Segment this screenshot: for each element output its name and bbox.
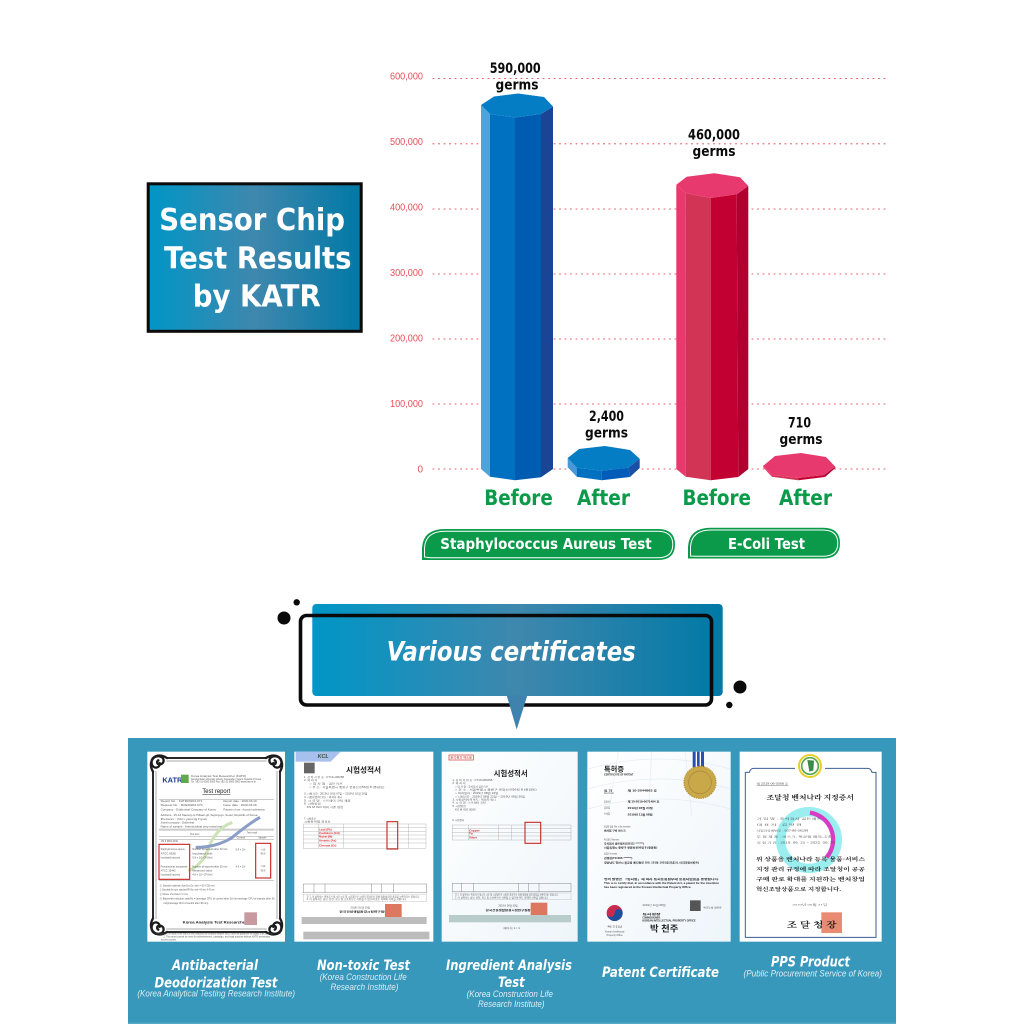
pill: Staphylococcus Aureus Test xyxy=(422,529,675,560)
certificate: KATR test report: Measured value xyxy=(192,869,213,872)
certificate: KATR test report: Test item xyxy=(190,833,199,836)
certificate: non-toxic test report: 한국건설생활환경시험연구원장 xyxy=(339,910,389,914)
certificate: KATR test report: Staphylococcus aureus xyxy=(161,848,185,851)
caption: ingredient analysis test: Test xyxy=(498,975,526,991)
caption: non-toxic test: Non-toxic Test xyxy=(317,958,411,974)
certificate: ingredient analysis test report: 2. 의 뢰 자 xyxy=(452,781,467,785)
certificate: patent: has been registered at the Korean Intellectual Property Office. xyxy=(604,886,692,889)
bar: E-Coli before xyxy=(676,173,748,480)
title box: Sensor Chip Test Results by KATR xyxy=(148,184,361,331)
y axis labels and grid lines: 600,000 xyxy=(390,72,423,82)
certificate: PPS product: 구매 판로 확대를 지원하는 벤처창업 xyxy=(756,876,865,883)
certificate: ingredient analysis test report: ○ 회 사 명 : 주식회사 골든리프 xyxy=(455,784,489,788)
certificate: non-toxic test report: 5. 시 료 명 : 스프레이 코팅 제품 xyxy=(304,798,352,802)
certificate: patent: This is to certify that, in accordance with the Patent Act, a patent for the invention xyxy=(604,882,720,885)
certificate: ingredient analysis test report: 시험성적서 xyxy=(494,768,528,778)
certificate: KATR test report: Company : Goldenleaf Company of Korea xyxy=(161,808,217,811)
certificate: KATR test report: Issue date : 2020.03.26 xyxy=(223,804,258,807)
value: 2,400 germs xyxy=(585,409,628,442)
caption: patent certificate: Patent Certificate xyxy=(602,965,719,981)
certificate: ingredient analysis test report: ○ 의뢰일자 : 2019년 08월 22일 xyxy=(455,791,498,795)
value: 590,000 germs: germs xyxy=(496,78,538,94)
certificate: PPS product: 대 표 자 : 김 영 현 xyxy=(757,822,802,826)
certificate: patent: 김영현(741005-*******) xyxy=(604,856,633,860)
certificate: KATR test report: KATR xyxy=(162,775,183,784)
certificate: patent: Property Office xyxy=(607,934,623,937)
caption: antibacterial deodorization test: Antibacterial xyxy=(171,958,258,974)
value: 710 germs xyxy=(780,416,822,448)
caption: antibacterial deodorization test xyxy=(137,958,295,1000)
certificate: non-toxic test report: KS M ISO 의뢰 기준 방법 xyxy=(307,805,343,809)
certificate: KATR test report: 4.6 × 10⁵ xyxy=(236,864,246,868)
certificate: patent xyxy=(587,752,731,942)
certificate: patent: COMMISSIONER, xyxy=(642,918,661,920)
certificate: KATR test report: Incubated bacteria xyxy=(161,856,181,859)
certificate: non-toxic test report: 2. 의 뢰 자 xyxy=(304,778,318,782)
certificate: KATR test report: Incubated bacteria xyxy=(161,874,181,877)
certificate: KATR test report: Test result xyxy=(247,832,258,835)
certificate: KATR test report: Pseudomonas aeruginosa xyxy=(161,865,188,868)
caption: non-toxic test: Research Institute) xyxy=(330,982,398,993)
certificate: patent: Patent Number xyxy=(604,792,614,795)
certificate: KATR test report: ② Standard film type: standard PE film, size = 40 mm X 40 mm xyxy=(160,888,215,892)
certificate: PPS product: 2019년 06월 21일 xyxy=(792,903,829,907)
category labels: before and after: Before xyxy=(484,486,553,510)
certificate: ingredient analysis test report: 2019년 08월 30일 xyxy=(498,904,518,908)
certificate: patent: 발명자 Inventor xyxy=(604,852,618,856)
certificate: non-toxic test report: Chrome (Cr) xyxy=(319,843,336,847)
certificate: KATR test report: Address : 25-16 Saeung-ro Hillaeri-gil, Sejong-gu, Seoul, Republic of Korea xyxy=(161,814,258,817)
certificate: patent: 경상남도 양산시 물금읍 메디컬로 100, 101동 1001호(가촌리, 이지더원아파트) xyxy=(604,861,699,865)
certificate: non-toxic test report xyxy=(294,752,433,942)
certificate: KATR test report: Person : Kim young hyun xyxy=(161,818,209,821)
certificate: patent: 제 10-2044863 호 xyxy=(628,788,658,792)
title box: Sensor Chip Test Results by KATR: Test Results xyxy=(164,241,352,276)
bar: Staphylococcus after xyxy=(568,446,640,480)
certificate: non-toxic test report: ○ 회 사 명 : 골든리프 xyxy=(309,781,344,785)
certificate: patent: 박 천주 xyxy=(650,923,679,933)
certificate: patent: 특허권자 Patentee xyxy=(604,838,620,842)
y axis labels and grid lines xyxy=(390,72,887,476)
certificate: KATR test report: Report No. : KATR00203-071 xyxy=(161,800,203,803)
value: 2,400 germs: germs xyxy=(585,426,628,442)
caption: PPS product: (Public Procurement Service of Korea) xyxy=(744,969,882,980)
title box: Sensor Chip Test Results by KATR: by KATR xyxy=(193,280,321,315)
certificate: PPS product: 지 정 기 간 : 2019. 06. 21 ~ 2022. 06. 20 xyxy=(757,840,836,844)
certificate: patent: 2019년 06월 24일 xyxy=(628,806,653,810)
certificate: non-toxic test report: 주 1. 이 성적서는 의뢰자가 제시한 시료 및 시료명으로 시험한 결과로서 전체 제품에 대한 품질을 보증하지는 않습니다. xyxy=(307,894,420,898)
certificate: patent: KOREAN INTELLECTUAL PROPERTY OFFICE xyxy=(642,920,696,923)
certificate: KATR test report: Korea Analysis Test Researcher (KATR) xyxy=(191,775,246,778)
certificate: KATR test report: Request No. : RAN00203-070 xyxy=(161,804,203,807)
caption: ingredient analysis test: (Korea Construction Life xyxy=(467,989,553,1000)
certificate: patent: Korean Intellectual xyxy=(605,931,625,934)
certificate: PPS product: 기 업 명 : 주식회사 골든레프 xyxy=(757,816,824,820)
certificate: KATR test report: Sample xyxy=(258,838,267,840)
banner: Various certificates: Various certificates xyxy=(387,637,636,668)
certificate: KATR test report: ATCC 15442 xyxy=(161,869,176,872)
certificate: non-toxic test report: 7. 시험결과 xyxy=(304,816,317,820)
certificate: KATR test report: incubated with xyxy=(192,852,213,855)
y axis labels and grid lines: 100,000 xyxy=(390,399,423,410)
y axis labels and grid lines: 500,000 xyxy=(390,137,423,148)
pill: E-Coli Test xyxy=(688,528,840,558)
value: 460,000 germs: 460,000 xyxy=(688,128,740,144)
certificate: PPS product: 지정 관리 규정에 따라 조달청이 공공 xyxy=(756,866,865,873)
certificate: PPS product: 제 2019-06-0068 호 xyxy=(757,782,790,786)
certificate: KATR test report: Purpose of use : Account submission xyxy=(223,808,266,811)
bar: E-Coli after xyxy=(763,453,835,480)
certificate: KATR test report: Number of bacteria after 30 min xyxy=(192,848,228,851)
certificate: patent: 주식회사 골든레프(180111-*******) xyxy=(604,842,644,846)
certificate: KATR test report: 5.9 × 10⁵ xyxy=(236,847,246,851)
certificate: KATR test report: Submit company : Goldenleaf xyxy=(161,822,194,825)
certificate: non-toxic test report: KCL xyxy=(318,754,329,760)
certificate: patent: 서울특별시 중랑구 봉화산로56길 8 (중화동) xyxy=(604,846,658,850)
certificate: ingredient analysis test report: 1. 성 적 서 번 호 : CT19-084258 xyxy=(452,778,493,782)
caption: ingredient analysis test xyxy=(446,958,572,1010)
certificate: PPS product: 혁신조달상품으로 지정합니다. xyxy=(756,886,842,893)
certificate: non-toxic test report: 시험성적서 xyxy=(346,764,381,774)
certificate: KATR test report: 4.6 × 10⁵ CFU/ml xyxy=(192,873,213,877)
certificate: ingredient analysis test report: 한국건설생활환경시험연구원장 xyxy=(486,908,532,912)
certificate: non-toxic test report: ○ 주 소 : 서울특별시 중랑구 봉화산로56길 8 (중화동) xyxy=(309,785,385,789)
certificate: non-toxic test report: 시험항목별 결과표 xyxy=(304,819,332,823)
caption: ingredient analysis test: Ingredient Analysis xyxy=(446,958,572,974)
certificate: non-toxic test report: 6. 시험방법 xyxy=(304,802,321,806)
y axis labels and grid lines: 0 xyxy=(418,464,424,476)
category labels: before and after: After xyxy=(779,486,833,510)
certificate: patent: 특허증 xyxy=(604,765,625,774)
certificate: ingredient analysis test report: 6. 시험결과 xyxy=(452,818,465,822)
value: 590,000 germs: 590,000 xyxy=(490,61,541,77)
value: 2,400 germs: 2,400 xyxy=(589,409,624,425)
caption: ingredient analysis test: Research Institute) xyxy=(478,999,544,1010)
certificate: patent: 센서칩 구비 마스크 xyxy=(604,828,627,832)
caption: antibacterial deodorization test: Deodorization Test xyxy=(154,975,279,991)
certificate: patent: 위의 발명은 「특허법」에 따라 특허등록원부에 등록되었음을 증명합니다. xyxy=(604,877,720,881)
certificate: KATR test report: 99.9 xyxy=(261,854,266,856)
caption: non-toxic test xyxy=(317,958,411,993)
certificate: patent: CERTIFICATE OF PATENT xyxy=(604,774,634,777)
certificate: KATR test report: ④ Bacterial reduction rate(%) = (average CFU of control after 30 min-average CFU of sample after 30 xyxy=(160,896,275,900)
value: 460,000 germs xyxy=(688,128,740,160)
certificate: ingredient analysis test report xyxy=(442,752,578,942)
certificate: PPS product: 조 달 청 장 xyxy=(787,919,837,929)
certificate: non-toxic test report: 4. 시험방법/적 용도 : 의뢰자 제시 xyxy=(304,795,342,799)
certificate: KATR test report: Name of sample : Antimicrobial chip metal paint xyxy=(161,826,224,829)
certificate: KATR test report: any other purposes xyxy=(161,938,177,941)
certificate: ingredient analysis test report: 3. 시험성적서의 용도 : 의뢰자 제시 xyxy=(452,798,496,802)
pill: Staphylococcus Aureus Test: Staphylococcus Aureus Test xyxy=(440,535,652,553)
certificate: ingredient analysis test report: ○ 주 소 : 서울특별시 중랑구 봉화산로56길 8 (중화동) xyxy=(455,788,537,792)
certificate: patent: 특허청장 xyxy=(642,912,662,916)
certificate: patent: 2019년 11월 08일 xyxy=(642,903,666,907)
bar: Staphylococcus before xyxy=(481,94,553,480)
certificate: PPS product xyxy=(740,752,882,942)
certificate: KATR test report: Control xyxy=(237,837,246,840)
title box: Sensor Chip Test Results by KATR: Sensor Chip xyxy=(159,203,345,238)
category labels: before and after: After xyxy=(577,486,631,510)
certificate: PPS product: 사업자등록번호 : 607-86-36199 xyxy=(757,828,809,832)
certificate: patent: 제 10-2019-0071484 호 xyxy=(628,800,660,804)
certificate: ingredient analysis test report: Tin xyxy=(469,832,473,836)
certificate: patent: 특 허 xyxy=(604,788,612,792)
certificate: ingredient analysis test report: Copper xyxy=(469,828,481,832)
certificate: patent: 특허청 xyxy=(607,924,622,928)
certificate: ingredient analysis test report: 5. 시험방법 xyxy=(452,804,466,808)
certificate: KATR test report: Test report xyxy=(202,788,231,795)
certificate: non-toxic test report: 2019년 10월 29일 xyxy=(351,905,370,909)
caption: PPS product: PPS Product xyxy=(771,955,851,971)
certificate: ingredient analysis test report: ○ 시험기간 : 2019년 08월 22일 ~ 2019년 08월 30일 xyxy=(455,794,525,798)
certificate: KATR test report: 5.9 × 10⁵ CFU/ml xyxy=(192,855,213,859)
certificate: patent: 2019년 11월 08일 xyxy=(628,812,653,816)
certificate: KATR test report: <10 xyxy=(261,848,266,851)
certificate: KATR test report: Tel. +82-31-0000-0000 Fax +82-31-0000-0000 www.katr.re.kr xyxy=(191,781,256,784)
value: 710 germs: germs xyxy=(780,432,822,448)
certificate: patent: 출원번호 xyxy=(604,799,611,803)
value: 590,000 germs xyxy=(490,61,541,94)
certificate: ingredient analysis test report: 4. 시 료 명 : 스프레이 코팅 xyxy=(452,801,486,805)
category labels: before and after xyxy=(484,486,833,510)
certificate: KATR test report: Number of bacteria after 30 min xyxy=(192,865,228,868)
y axis labels and grid lines: 300,000 xyxy=(390,268,423,279)
certificate: non-toxic test report: Lead (Pb) xyxy=(319,827,332,831)
certificate: KATR test report: ③ Volume of inoculum: 0.4 mL xyxy=(160,892,189,896)
certificate: PPS product: 위 상품을 벤처나라 등록 물품·서비스 xyxy=(756,856,865,863)
certificate: non-toxic test report: 2. 이 성적서는 홍보, 선전, 광고 및 소송용으로 사용될 수 없으며 용도 이외의 사용을 금합니다. xyxy=(307,897,407,901)
certificate: KATR test report xyxy=(147,752,285,942)
caption: non-toxic test: (Korea Construction Life xyxy=(320,972,407,983)
certificate: ingredient analysis test report: 주 1. 이 성적서는 의뢰자가 제시한 시료 및 시료명으로 시험한 결과로서 전체 제품에 대한 품질을 보증하지는 않습니다. xyxy=(455,893,559,897)
pill: E-Coli Test: E-Coli Test xyxy=(728,535,805,553)
certificate: non-toxic test report: 1. 성 적 서 번 호 : CT19-100258 xyxy=(304,775,345,779)
caption: PPS product xyxy=(744,955,882,980)
value: 460,000 germs: germs xyxy=(692,144,736,160)
certificate: KATR test report: <10 xyxy=(261,865,266,868)
caption: antibacterial deodorization test: (Korea Analytical Testing Research Institute) xyxy=(137,989,295,1000)
certificate: patent: 특허등록 확인용 xyxy=(703,905,723,909)
certificate: KATR test report: Remarks 1. The report is the result of test conducted by company samples only, it does not guarantee the quality of all products xyxy=(156,933,273,936)
certificate: PPS product: 우 정 제 품 : 마스크, 항균칩 패치_1종 xyxy=(757,834,833,838)
certificate: patent: 등록일 xyxy=(604,812,610,816)
certificate: KATR test report: Report date : 2020.03.10 xyxy=(223,800,258,803)
certificate: non-toxic test report: Arsenic (As) xyxy=(319,839,336,843)
certificate: patent: 발명의 명칭 Title of the Invention xyxy=(604,824,631,828)
certificate: KATR test report: min)/(average CFU of control after 30 min) xyxy=(163,902,209,905)
certificate: KATR test report: Korea Analysis Test Researcher xyxy=(183,919,247,924)
certificate: KATR test report: JIS Z 2801:2010 xyxy=(161,841,179,843)
value: 710 germs: 710 xyxy=(788,416,811,432)
certificate: ingredient analysis test report: KS M ISO 0000 xyxy=(455,810,477,812)
category labels: before and after: Before xyxy=(682,486,751,510)
certificate: KATR test report: ATCC 6538 xyxy=(161,852,177,855)
certificate: KATR test report: ① Sample material: Ag+Cu+Zn, size = 50 X 50 mm xyxy=(160,883,215,887)
certificate: ingredient analysis test report: 2. 이 성적서는 홍보, 선전, 광고 및 소송용으로 사용될 수 없으며 용도 이외의 사용을 금합니다. xyxy=(455,895,549,899)
banner: Various certificates xyxy=(278,599,746,730)
certificate: ingredient analysis test report: 페이지 1 / 1 xyxy=(503,926,521,930)
y axis labels and grid lines: 200,000 xyxy=(390,334,423,344)
certificate: non-toxic test report: Nickel (Ni) xyxy=(319,835,332,839)
certificate: KATR test report: Sungkyunkwan University Industry Cooperation, Suwon, Republic of Korea xyxy=(191,778,262,781)
certificate: ingredient analysis test report: 분석결과 제출용 xyxy=(450,755,472,760)
certificate: PPS product: 조달청 벤처나라 지정증서 xyxy=(767,792,854,801)
panel: certificates xyxy=(128,738,896,1024)
y axis labels and grid lines: 400,000 xyxy=(390,202,423,214)
certificate: non-toxic test report: 3. 시험기간 : 2019년 10월 07일 ~ 2019년 10월 29일 xyxy=(304,792,367,796)
certificate: non-toxic test report: Cadmium (Cd) xyxy=(319,831,340,835)
certificate: patent: 출원일 xyxy=(604,805,610,809)
certificate: KATR test report: 2. The report cannot be used for advertisement, campaign, and legal purpose without KATR permission xyxy=(163,935,271,938)
certificate: ingredient analysis test report: Silver xyxy=(469,835,478,839)
certificate: KATR test report: 99.9 xyxy=(261,870,266,872)
bar chart: germ counts before and after xyxy=(390,61,887,510)
